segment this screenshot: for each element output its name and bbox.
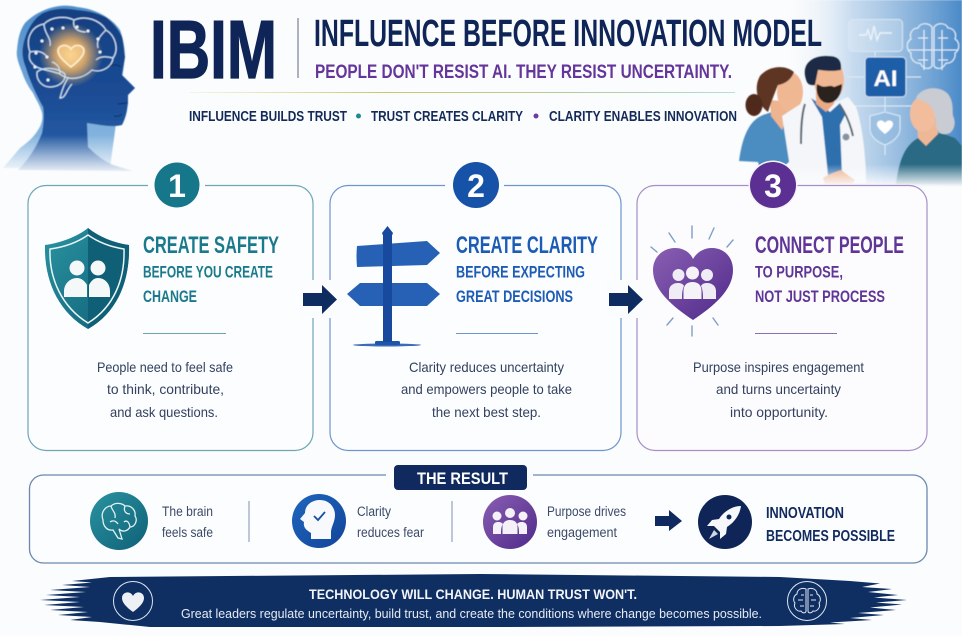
text: innovation becomes possible: BECOMES POSSIBLE: [766, 528, 895, 545]
text: clarity heading: [456, 232, 598, 306]
text: clarity reduces fear: Clarity: [357, 504, 391, 519]
text: banner headline: TECHNOLOGY WILL CHANGE. HUMAN TRUST WON'T.: [309, 586, 637, 602]
banner: closing message: [40, 574, 907, 627]
face details: [110, 65, 127, 116]
text: brain feels safe: [162, 504, 213, 540]
badge: number 3: 3: [764, 168, 782, 204]
icon: AI chip: AI: [874, 66, 898, 91]
panel: step 2 create clarity: [330, 162, 621, 450]
text: purpose heading: TO PURPOSE,: [755, 262, 843, 282]
text: purpose drives engagement: engagement: [547, 525, 617, 540]
badge: number 2: 2: [467, 168, 485, 204]
text: safety description: [97, 359, 233, 420]
text: safety heading: CREATE SAFETY: [143, 232, 279, 259]
text: purpose description: and turns uncertainty: [716, 381, 841, 397]
arrow: step 2 to step 3: [607, 280, 645, 318]
shoulder fade: [0, 135, 150, 175]
text: innovation becomes possible: [766, 505, 895, 545]
text: clarity description: and empowers people to take: [401, 381, 572, 397]
text: purpose drives engagement: [547, 504, 626, 540]
icon: rays: [651, 226, 733, 336]
tagline row: CLARITY ENABLES INNOVATION: [549, 109, 737, 125]
text: clarity description: [401, 359, 572, 420]
icon: purple heart with people: [653, 248, 733, 320]
tagline row: [189, 109, 737, 125]
text: brain feels safe: The brain: [162, 504, 213, 519]
arrow: step 1 to step 2: [301, 280, 339, 318]
text: safety heading: [143, 232, 279, 306]
icon: brain badge: [788, 582, 826, 620]
text: safety heading: CHANGE: [143, 287, 197, 306]
panel: the result: [30, 465, 927, 563]
text: clarity heading: CREATE CLARITY: [456, 232, 598, 259]
text: safety description: and ask questions.: [110, 404, 218, 420]
title: IBIM: IBIM: [150, 3, 277, 96]
text: clarity description: Clarity reduces uncertainty: [409, 359, 564, 375]
text: banner message: Great leaders regulate uncertainty, build trust, and create the conditions where change becomes possible.: [181, 606, 762, 621]
panel: step 1 create safety: [28, 162, 313, 450]
text: purpose description: Purpose inspires engagement: [693, 359, 864, 375]
text: purpose description: into opportunity.: [730, 404, 828, 420]
illustration: head with glowing brain and heart: [0, 6, 150, 175]
text: safety description: to think, contribute,: [107, 381, 224, 397]
badge: number 1: [154, 162, 200, 208]
label: the result: [386, 465, 533, 490]
tagline row: INFLUENCE BUILDS TRUST: [189, 109, 347, 125]
head silhouette: [3, 6, 125, 168]
illustration: healthcare team with AI: [730, 0, 962, 187]
text: purpose heading: [755, 232, 904, 306]
text: brain feels safe: feels safe: [162, 525, 213, 540]
arrow: result: [655, 510, 682, 531]
icon: brain: [90, 492, 148, 550]
text: safety description: People need to feel safe: [97, 359, 233, 375]
figure: doctor: [782, 56, 866, 184]
icon: head with check: [292, 494, 346, 548]
badge: number 1: 1: [168, 168, 186, 204]
text: safety heading: BEFORE YOU CREATE: [143, 262, 273, 282]
header rule: [190, 92, 735, 93]
icon: vitals panel: [848, 20, 921, 155]
badge: number 2: [453, 162, 499, 208]
title divider: [298, 18, 299, 78]
brain outline: [28, 17, 116, 98]
icon: digital brain: [907, 24, 959, 70]
text: purpose heading: NOT JUST PROCESS: [755, 287, 885, 306]
tagline row: TRUST CREATES CLARITY: [371, 109, 523, 125]
text: clarity heading: GREAT DECISIONS: [456, 287, 573, 306]
text: clarity reduces fear: [357, 504, 424, 540]
icon: shield with people: [45, 228, 129, 329]
icon: signpost: [347, 226, 440, 346]
icon: heart badge: [114, 582, 152, 620]
text: clarity reduces fear: reduces fear: [357, 525, 424, 540]
label: the result: THE RESULT: [417, 469, 509, 488]
icon: rocket: [698, 495, 752, 549]
panel: step 3 connect people: [637, 160, 927, 450]
text: clarity heading: BEFORE EXPECTING: [456, 262, 585, 282]
text: purpose drives engagement: Purpose drives: [547, 504, 626, 519]
icon: glowing heart: [58, 45, 84, 67]
subtitle: PEOPLE DON'T RESIST AI. THEY RESIST UNCERTAINTY.: [315, 62, 732, 83]
icon: people: [483, 495, 537, 549]
figure: older woman: [896, 88, 962, 185]
badge: number 3: [748, 160, 798, 210]
text: purpose description: [693, 359, 864, 420]
figure: nurse: [739, 67, 803, 182]
text: clarity description: the next best step.: [432, 404, 541, 420]
icon: AI chip: [865, 57, 906, 97]
icon: heart shield: [870, 112, 900, 145]
text: innovation becomes possible: INNOVATION: [766, 505, 844, 522]
